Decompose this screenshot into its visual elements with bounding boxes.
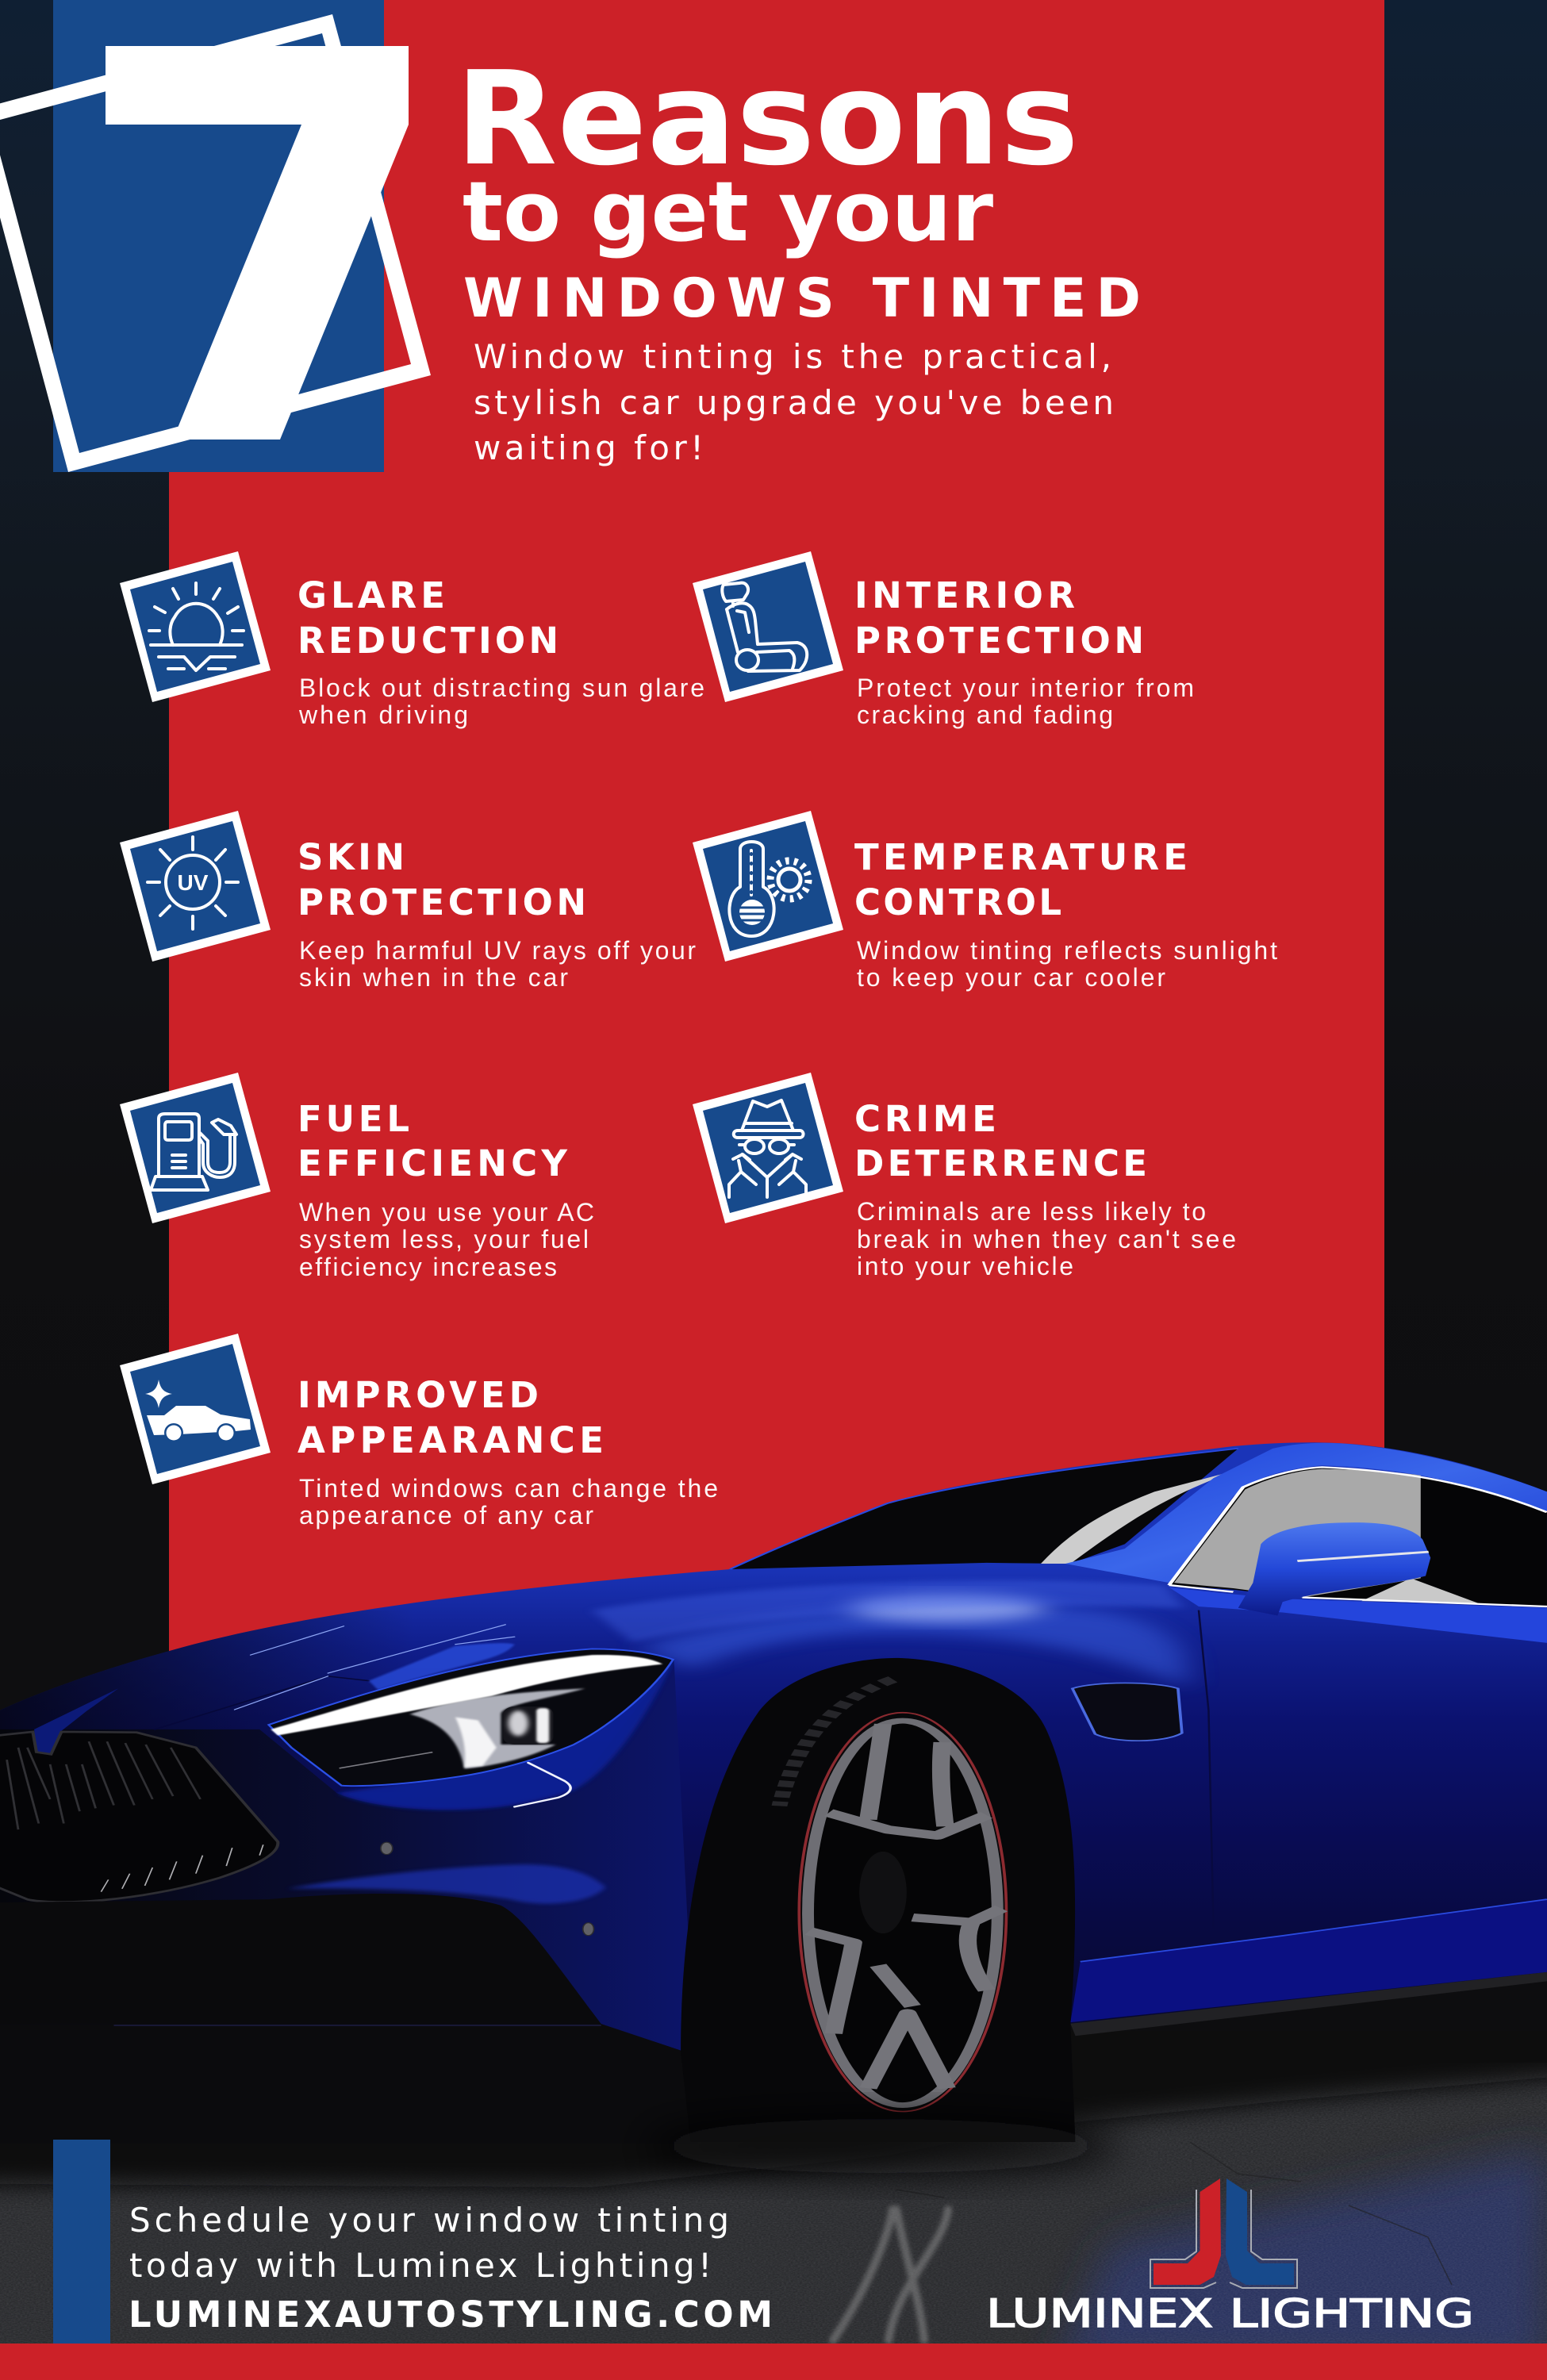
- heading: [298, 1374, 604, 1461]
- icon: shiny car: [120, 1334, 271, 1484]
- heading: SKIN: [298, 836, 405, 878]
- underbody shadow: [0, 2061, 698, 2144]
- windshield reflection: [1041, 1470, 1238, 1564]
- item: glare reduction: [120, 551, 704, 729]
- sports car: [0, 1442, 1547, 2036]
- description: Protect your interior from: [857, 674, 1194, 702]
- description: [298, 674, 704, 729]
- item: improved appearance: [120, 1334, 718, 1530]
- call to action: LUMINEXAUTOSTYLING.COM: [129, 2294, 773, 2336]
- tilted white frame: [0, 14, 431, 472]
- heading: IMPROVED: [298, 1374, 539, 1416]
- description: Criminals are less likely to: [857, 1197, 1206, 1226]
- nose wedge: [34, 1688, 118, 1755]
- description: Window tinting reflects sunlight: [857, 936, 1277, 965]
- headlight: [269, 1649, 673, 1806]
- heading: [854, 574, 1144, 662]
- underbody dark: [0, 2024, 692, 2063]
- heading: FUEL: [298, 1098, 409, 1140]
- intro text: Window tinting is the practical,: [474, 337, 1111, 376]
- side marker vent: [1073, 1683, 1182, 1741]
- belt line: [1169, 1587, 1547, 1643]
- heading: [298, 1098, 568, 1184]
- icon: car seat: [693, 551, 843, 702]
- call to action: today with Luminex Lighting!: [129, 2246, 712, 2285]
- blue header block: [53, 0, 384, 472]
- item: skin protection: [120, 811, 696, 992]
- title: Reasons: [455, 44, 1079, 194]
- description: Block out distracting sun glare: [299, 674, 704, 702]
- heading: [298, 574, 559, 662]
- heading: PROTECTION: [298, 881, 586, 923]
- windshield: [730, 1449, 1238, 1569]
- sill line: [1081, 1899, 1547, 1962]
- door seam: [1199, 1610, 1214, 1929]
- body lighting: [0, 1580, 1189, 1792]
- heading: TEMPERATURE: [854, 836, 1188, 878]
- description: Tinted windows can change the: [299, 1474, 718, 1503]
- heading: [854, 836, 1188, 923]
- description: break in when they can't see: [857, 1225, 1236, 1253]
- hood left fade: [0, 1610, 414, 1792]
- icon: uv sun: UV: [178, 870, 209, 895]
- description: efficiency increases: [299, 1253, 557, 1281]
- icon: spy in hat and coat: [693, 1073, 843, 1223]
- bumper intake: [0, 1894, 601, 2024]
- description: cracking and fading: [857, 701, 1113, 729]
- icon: uv sun: [120, 811, 271, 962]
- side window black: [1169, 1467, 1547, 1606]
- description: when driving: [298, 701, 468, 729]
- bumper highlight: [287, 1864, 605, 1904]
- fender glow: [641, 1605, 1189, 1687]
- heading: CONTROL: [854, 881, 1061, 923]
- red center panel: [169, 0, 1384, 1745]
- car wheel and cabin: [681, 1443, 1547, 2142]
- floor: [0, 2066, 1547, 2344]
- window chrome trim: [1169, 1467, 1547, 1606]
- item: crime deterrence: [693, 1073, 1236, 1280]
- description: [857, 674, 1194, 729]
- bottom red band: [0, 2344, 1547, 2380]
- title: WINDOWS TINTED: [463, 267, 1141, 330]
- description: system less, your fuel: [299, 1225, 589, 1253]
- side window gray: [1174, 1469, 1421, 1598]
- heading: REDUCTION: [298, 620, 559, 662]
- grille: [0, 1732, 278, 1902]
- heading: APPEARANCE: [298, 1419, 604, 1461]
- description: appearance of any car: [299, 1501, 593, 1530]
- wheel: [779, 1679, 1006, 2112]
- projector lens: [503, 1706, 553, 1745]
- intro text: stylish car upgrade you've been: [474, 383, 1114, 422]
- description: into your vehicle: [857, 1252, 1073, 1280]
- tire contact shadow: [643, 2119, 1119, 2173]
- car front end: [0, 1625, 694, 2063]
- description: [299, 1474, 718, 1530]
- item: fuel efficiency: [120, 1073, 594, 1281]
- description: When you use your AC: [299, 1198, 594, 1226]
- seat cushion roll: [736, 650, 758, 670]
- sill trim: [1070, 1972, 1547, 2036]
- heading: [854, 1098, 1147, 1184]
- intro text: [474, 337, 1114, 467]
- description: [857, 936, 1277, 992]
- blue accent bar: [53, 2140, 110, 2344]
- hood gloss: [369, 1643, 515, 1690]
- heading: GLARE: [298, 574, 445, 616]
- bumper lip line: [114, 2025, 601, 2027]
- heading: EFFICIENCY: [298, 1142, 568, 1184]
- description: to keep your car cooler: [857, 963, 1165, 992]
- hood highlight: [592, 1580, 1184, 1642]
- description: [299, 936, 696, 992]
- wheel arch: [681, 1658, 1076, 2142]
- title: to get your: [463, 163, 993, 260]
- description: skin when in the car: [299, 963, 568, 992]
- front fascia: [0, 1660, 694, 2054]
- item: interior protection: [693, 551, 1194, 729]
- fender highlight: [848, 1595, 1046, 1622]
- logo: luminex lighting: [986, 2178, 1474, 2336]
- windshield trim: [730, 1449, 1238, 1569]
- description: [857, 1197, 1236, 1280]
- heading: INTERIOR: [854, 574, 1075, 616]
- window interior: [1361, 1578, 1480, 1604]
- hood shut line and reflections: [155, 1625, 515, 1729]
- side mirror: [1238, 1522, 1430, 1615]
- description: Keep harmful UV rays off your: [299, 936, 696, 965]
- icon: thermometer and sun: [693, 811, 843, 962]
- logo: luminex lighting: LUMINEX LIGHTING: [986, 2291, 1474, 2336]
- lower door panel: [1070, 1899, 1547, 2022]
- call to action: Schedule your window tinting: [129, 2201, 729, 2240]
- call to action: [129, 2201, 773, 2336]
- a-pillar and roof: [1065, 1443, 1547, 1583]
- icon: sun glare: [120, 551, 271, 702]
- heading: DETERRENCE: [854, 1142, 1147, 1184]
- cheek below headlight: [337, 1660, 674, 1810]
- heading: CRIME: [854, 1098, 996, 1140]
- title: [455, 44, 1141, 330]
- item: temperature control: [693, 811, 1277, 992]
- parking sensors: [381, 1842, 593, 1936]
- icon: fuel pump: [120, 1073, 271, 1223]
- heading: [298, 836, 586, 923]
- car body: [0, 1442, 1547, 2142]
- description: [299, 1198, 594, 1281]
- big number seven: [106, 46, 409, 440]
- intro text: waiting for!: [474, 428, 704, 467]
- heading: PROTECTION: [854, 620, 1144, 662]
